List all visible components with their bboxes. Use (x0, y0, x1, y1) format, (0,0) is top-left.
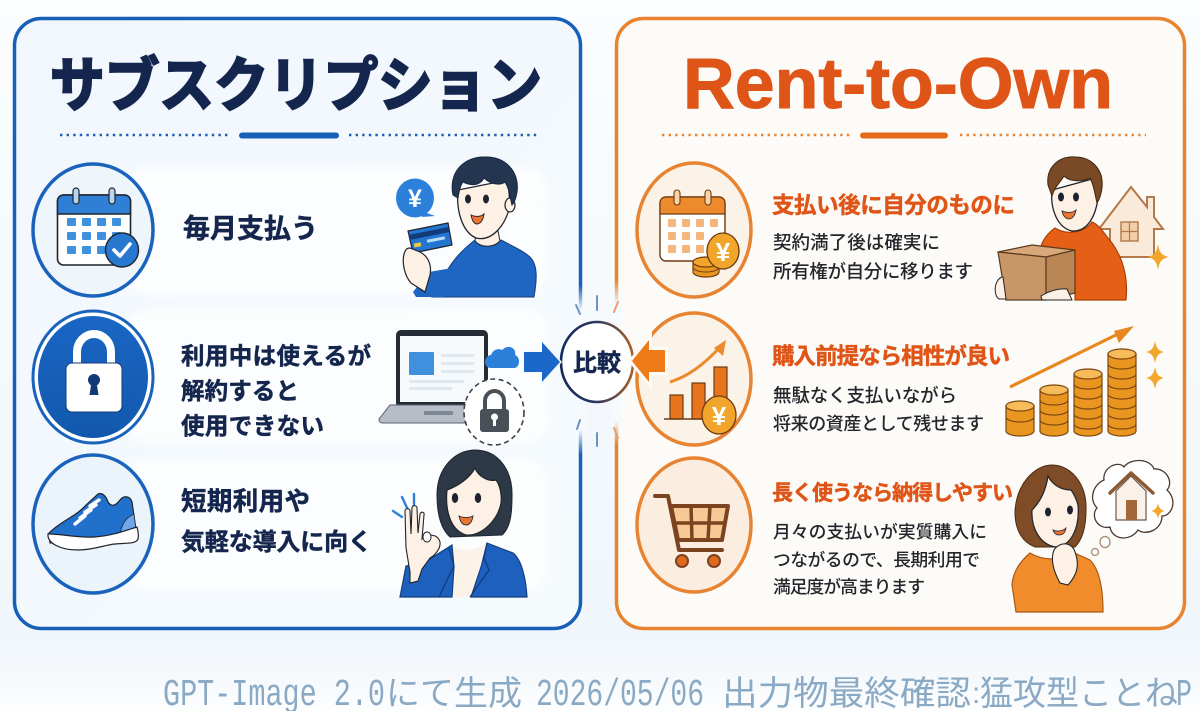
illustration: man with credit card (396, 157, 536, 297)
text: yours after payment (772, 193, 1015, 282)
text: satisfying for long use: 月々の支払いが実質購入に (773, 521, 987, 542)
inner top (451, 543, 486, 597)
arrow: from rent to own (632, 340, 665, 382)
panel edge fade left (576, 285, 586, 455)
arrow (1010, 332, 1122, 387)
box (998, 245, 1075, 257)
hand (403, 248, 431, 292)
icon: growth chart with yen coin (637, 313, 751, 445)
text: satisfying for long use: 満足度が高まります (773, 576, 925, 597)
sweater (1012, 553, 1103, 612)
icon: house in thought (1116, 476, 1146, 520)
compare badge (524, 296, 665, 446)
text: short-term use: 気軽な導入に向く (181, 529, 372, 556)
motion marks (393, 494, 414, 517)
text: short-term use (181, 488, 372, 556)
text: usable until cancelled: 解約すると (181, 378, 299, 404)
footer credit (163, 674, 1192, 711)
sweater (432, 240, 536, 297)
icon: calendar with check (33, 164, 153, 296)
rays (576, 296, 597, 446)
head (1052, 178, 1098, 231)
icon: yen bubble (396, 178, 435, 218)
panel edge fade right (612, 280, 622, 445)
face (1032, 476, 1078, 547)
cloud (485, 347, 519, 368)
icon: sneaker (33, 455, 153, 593)
dashed lock badge (464, 379, 524, 445)
panel: rent to own (616, 18, 1184, 628)
stack 2 (1040, 385, 1068, 436)
sparkle (1147, 244, 1169, 270)
text: good for purchase plans: 将来の資産として残せます (773, 413, 984, 434)
hair back (437, 450, 512, 537)
compare badge: 比較 (573, 350, 621, 377)
divider: rent to own (662, 132, 1146, 138)
text: pay monthly: 毎月支払う (183, 214, 318, 244)
text: usable until cancelled (181, 342, 372, 439)
illustration: woman imagining a house (1012, 460, 1173, 612)
row card 3 (125, 459, 547, 591)
arrow: from subscription (524, 342, 560, 382)
credit card (408, 223, 452, 253)
icon: calendar with yen coins: ¥ (716, 237, 731, 267)
footer credit: : (972, 677, 980, 710)
stack 1 (1006, 401, 1034, 436)
heading: rent to own: Rent-to-Own (683, 45, 1113, 124)
neck and face (475, 226, 500, 246)
text: good for purchase plans: 購入前提なら相性が良い (772, 343, 1010, 369)
text: satisfying for long use: 長く使うなら納得しやすい (772, 482, 1013, 505)
illustration: coin stacks with rising arrow (1006, 326, 1164, 436)
text: yours after payment: 支払い後に自分のものに (772, 193, 1015, 218)
text: usable until cancelled: 利用中は使えるが (181, 342, 372, 369)
stack 3 (1074, 369, 1102, 436)
illustration: woman with OK sign (393, 450, 527, 597)
house (1099, 187, 1163, 257)
icon: yen bubble: ¥ (408, 185, 422, 213)
OK hand (405, 506, 440, 583)
text: yours after payment: 所有権が自分に移ります (773, 261, 973, 282)
panel: subscription (14, 18, 580, 628)
text: short-term use: 短期利用や (181, 488, 310, 516)
icon: growth chart with yen coin: ¥ (712, 401, 727, 431)
text: satisfying for long use (772, 482, 1013, 597)
eyes and mouth (465, 194, 471, 204)
hands (995, 277, 1006, 299)
row card 2 (125, 309, 549, 443)
icon: shopping cart (637, 458, 751, 592)
text: yours after payment: 契約満了後は確実に (773, 232, 940, 253)
text: good for purchase plans (772, 343, 1010, 434)
illustration: laptop with cloud and lock (379, 330, 524, 445)
divider: subscription (60, 132, 538, 138)
text: good for purchase plans: 無駄なく支払いながら (773, 385, 957, 406)
icon: calendar with yen coins (637, 163, 751, 297)
text: usable until cancelled: 使用できない (181, 413, 324, 439)
hair (452, 157, 517, 205)
hair (1015, 465, 1086, 547)
icon: padlock (33, 311, 153, 443)
face (447, 468, 501, 535)
sparkles (1146, 341, 1164, 389)
hands (1052, 544, 1077, 585)
stack 4 (1108, 349, 1136, 436)
hoodie (1040, 222, 1126, 300)
jacket (400, 543, 527, 597)
illustration: man with box and house (995, 157, 1169, 300)
row card 1 (125, 167, 547, 295)
heading: subscription: サブスクリプション (50, 53, 542, 119)
text: satisfying for long use: つながるので、長期利用で (773, 549, 980, 570)
thought bubble (1092, 460, 1173, 556)
